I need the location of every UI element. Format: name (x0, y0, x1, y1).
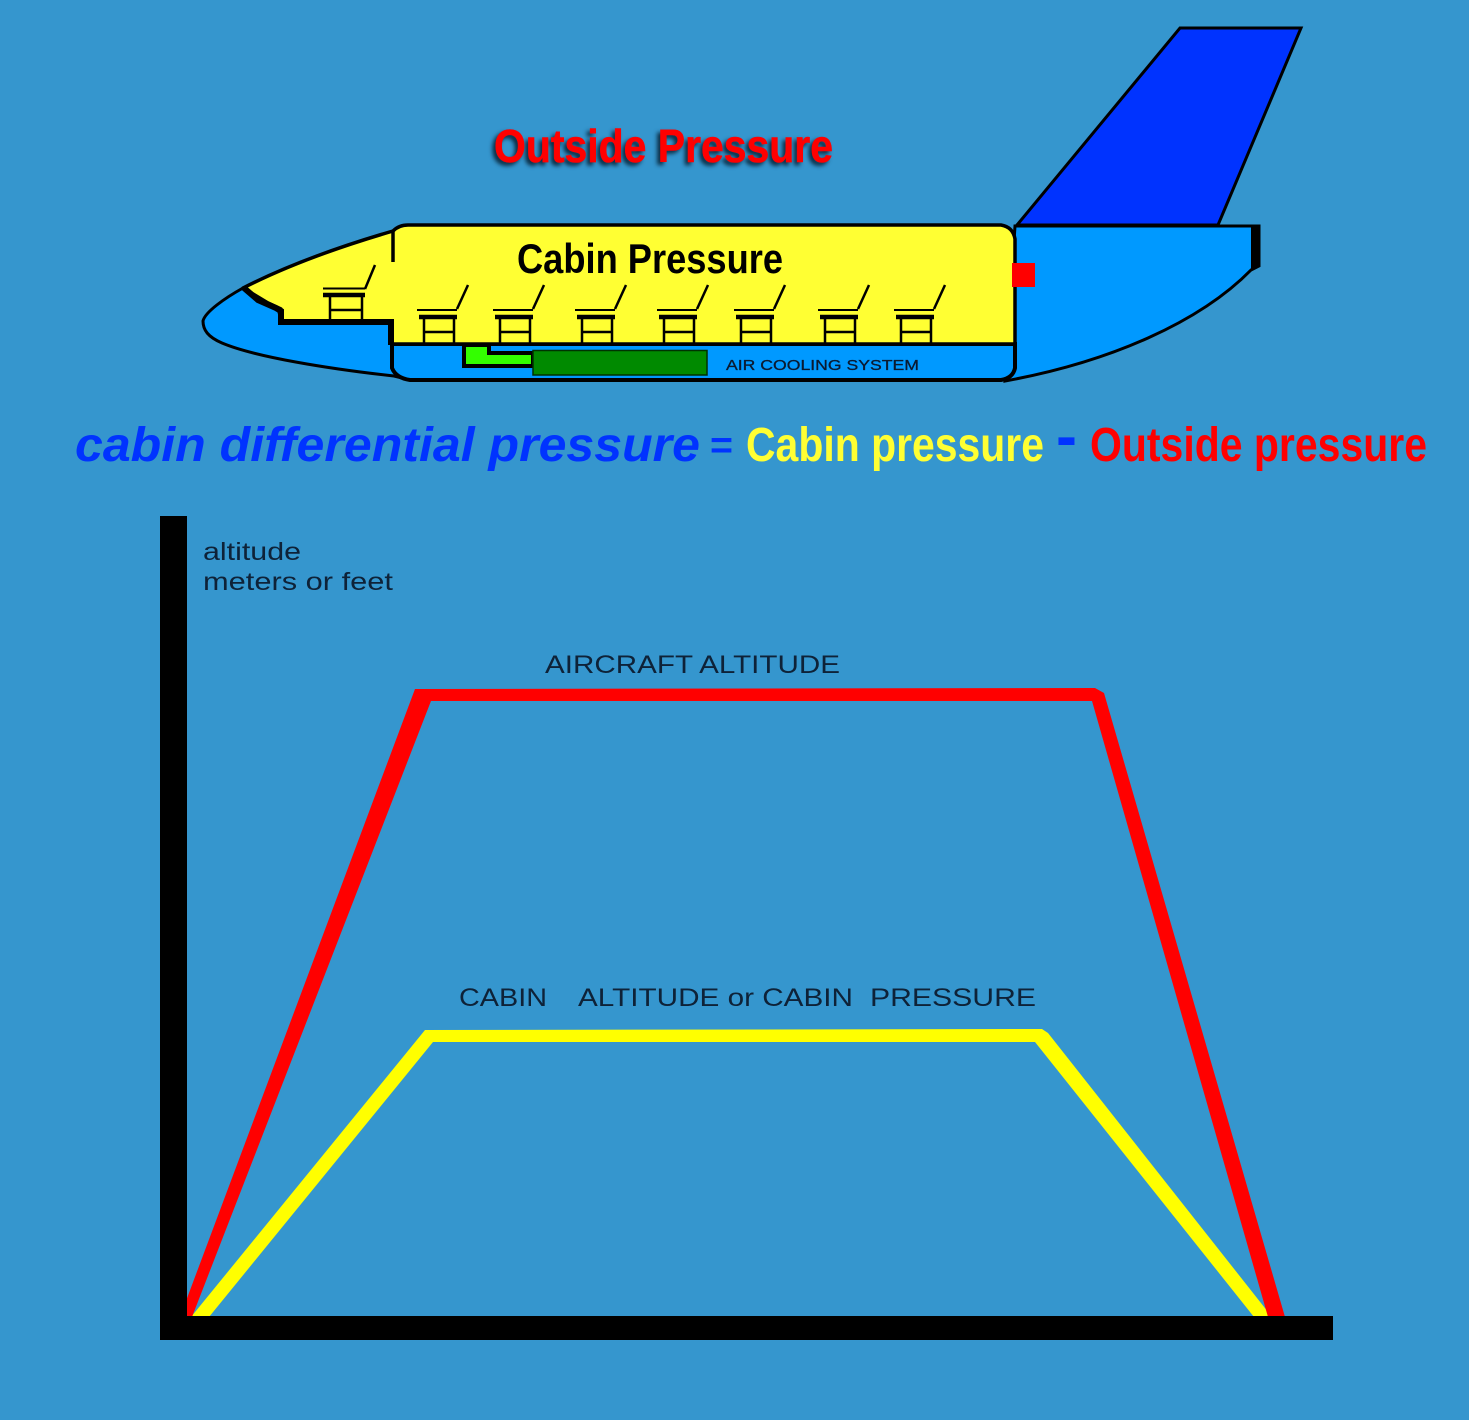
cabin pressure label: Cabin Pressure (517, 235, 783, 282)
cabin altitude label: CABIN (459, 984, 547, 1012)
cabin altitude label: ALTITUDE or CABIN (578, 984, 853, 1012)
pressurized cabin and cockpit (243, 225, 1015, 344)
equation (75, 400, 1427, 472)
cabin altitude label: PRESSURE (870, 984, 1036, 1012)
x axis (160, 1316, 1333, 1340)
air cooling label: AIR COOLING SYSTEM (726, 357, 919, 374)
cabin altitude line (191, 1029, 1272, 1317)
aircraft altitude label: AIRCRAFT ALTITUDE (545, 651, 840, 679)
rear fuselage (1005, 226, 1259, 381)
cabin lower hold (392, 344, 1015, 380)
passenger seats (417, 285, 945, 343)
cabin altitude label (459, 984, 1036, 1012)
altitude chart (160, 516, 1333, 1340)
y axis label: altitude (203, 538, 301, 566)
air cooling unit (533, 350, 707, 375)
nose underside (203, 288, 410, 380)
equals sign: = (710, 425, 733, 467)
cockpit floor (244, 288, 391, 345)
y axis label: meters or feet (203, 568, 393, 596)
outflow valve (1012, 263, 1035, 287)
equation: cabin differential pressure: cabin differential pressure (75, 419, 700, 472)
air duct (464, 345, 533, 366)
y axis (160, 516, 187, 1340)
minus sign: - (1056, 400, 1077, 472)
title: outside pressure: Outside Pressure (494, 120, 833, 172)
equation: cabin pressure: Cabin pressure (746, 419, 1044, 472)
cockpit door line (391, 231, 395, 262)
y axis label (203, 538, 393, 596)
tail fin (1017, 28, 1301, 225)
aircraft cutaway diagram (203, 28, 1301, 381)
aircraft altitude line (180, 688, 1285, 1317)
cockpit seat (323, 265, 375, 322)
